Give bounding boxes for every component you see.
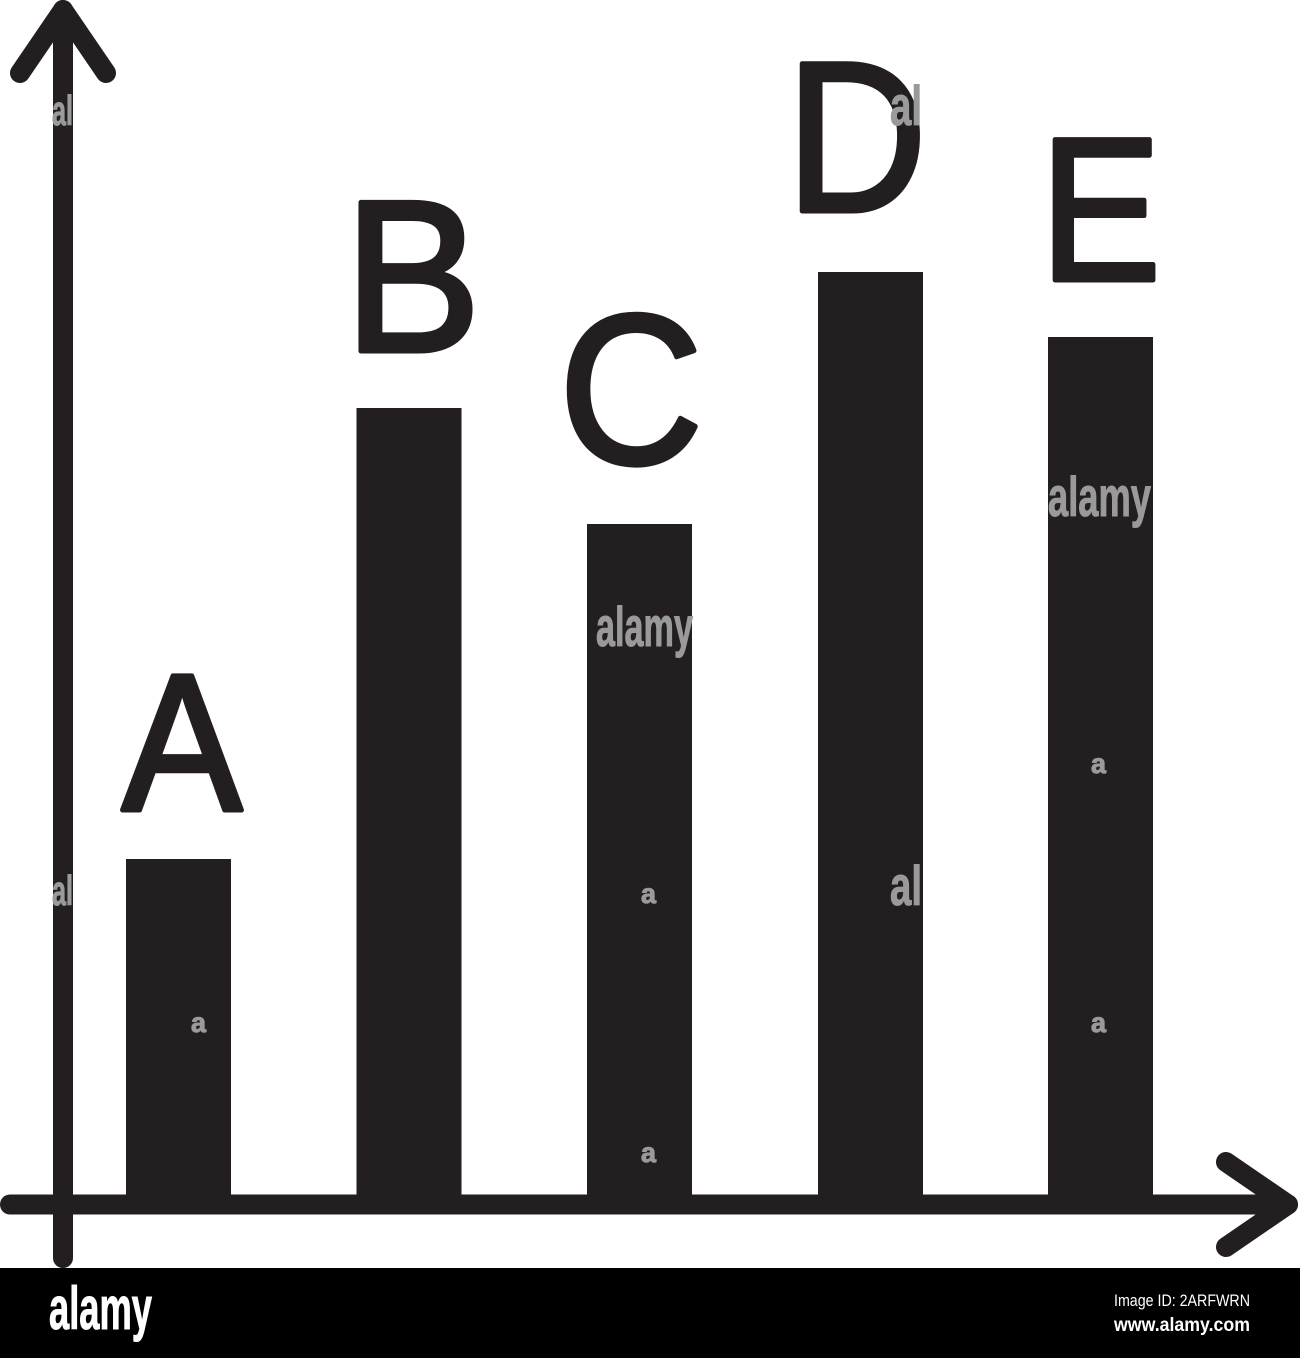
horizontal axis arrow (10, 1162, 1288, 1247)
watermarks: al (52, 867, 73, 914)
watermarks: a (191, 1007, 206, 1038)
vertical axis arrow (20, 10, 106, 1258)
bar A (126, 859, 231, 1204)
watermarks: al (890, 854, 922, 917)
watermarks: a (641, 878, 656, 909)
footer logo: alamy (49, 1275, 152, 1342)
watermarks: a (641, 1137, 656, 1168)
watermarks: a (1091, 748, 1106, 779)
watermarks: alamy (1048, 465, 1151, 528)
watermarks (52, 74, 1151, 1168)
watermarks: al (52, 87, 73, 134)
site url: www.alamy.com (1113, 1315, 1250, 1336)
image id: Image ID: 2ARFWRN (1114, 1291, 1250, 1310)
bar C (587, 524, 692, 1204)
watermarks: a (1091, 1007, 1106, 1038)
letter D: D (786, 18, 927, 257)
bar D (818, 272, 923, 1204)
bar B (356, 408, 462, 1204)
letter B: B (344, 155, 481, 397)
bar E (1048, 337, 1153, 1204)
watermarks: al (890, 74, 922, 137)
letter A: A (122, 634, 242, 852)
footer band (0, 1268, 1300, 1358)
watermarks: alamy (596, 595, 693, 658)
letter C: C (559, 271, 703, 509)
letter E: E (1040, 96, 1161, 324)
